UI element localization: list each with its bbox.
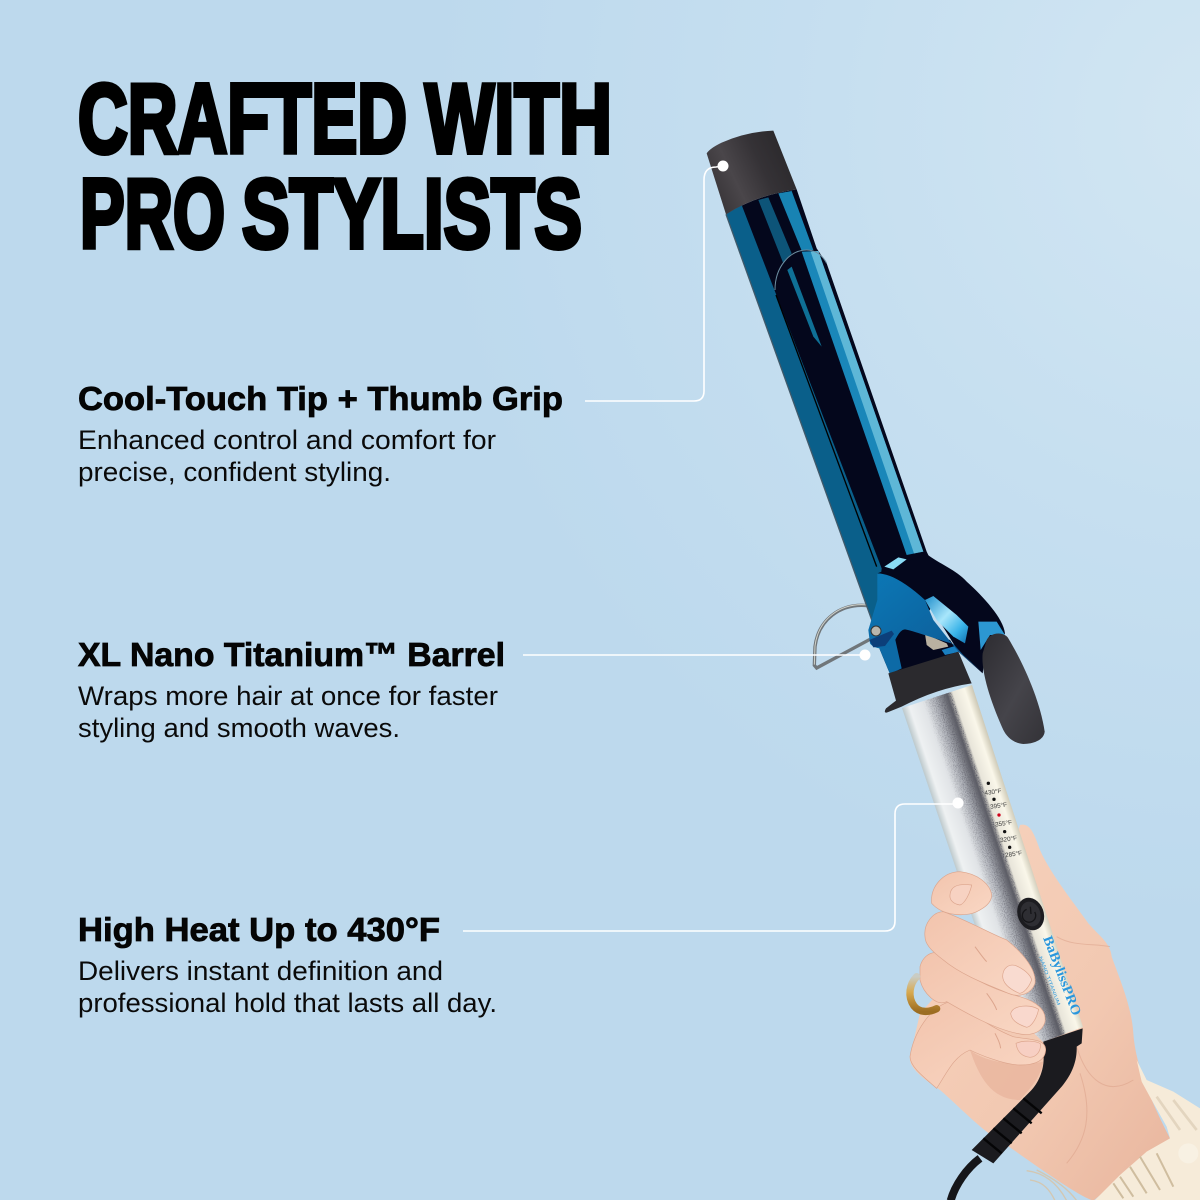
connector: barrel bbox=[523, 650, 870, 660]
callout: high heat: professional hold that lasts all day. bbox=[78, 988, 497, 1018]
temperature scale: 355°F bbox=[995, 818, 1013, 829]
power button bbox=[1013, 894, 1049, 934]
callout: high heat bbox=[78, 912, 497, 1018]
callout: high heat: High Heat Up to 430°F bbox=[78, 912, 440, 949]
brand label: NANO TITANIUM bbox=[1038, 956, 1061, 1006]
callout: barrel: styling and smooth waves. bbox=[78, 713, 400, 743]
title: WITH bbox=[425, 64, 612, 174]
connector: tip bbox=[585, 160, 728, 401]
product: curling iron held in hand bbox=[463, 131, 1200, 1200]
callout: barrel: XL Nano Titanium™ Barrel bbox=[78, 637, 505, 674]
clamp housing bbox=[868, 554, 1005, 674]
barrel bbox=[726, 189, 943, 667]
temperature scale: 285°F bbox=[1005, 849, 1023, 859]
temperature scale: 320°F bbox=[1000, 834, 1018, 844]
temperature scale: 430°F bbox=[984, 787, 1002, 797]
thumb grip paddle bbox=[982, 633, 1045, 744]
callout: high heat: Delivers instant definition and bbox=[78, 956, 443, 986]
callout: barrel: Wraps more hair at once for faster bbox=[78, 681, 498, 711]
title: STYLISTS bbox=[242, 158, 582, 268]
brand label: BaBylissPRO bbox=[1039, 934, 1083, 1018]
barrel: clamp highlight bbox=[802, 251, 923, 555]
silver handle bbox=[902, 685, 1083, 1042]
title: PRO bbox=[80, 158, 225, 268]
barrel: left teal band bbox=[726, 205, 882, 630]
temperature scale bbox=[984, 782, 1023, 859]
cool-touch tip bbox=[707, 131, 797, 214]
wire clamp lever bbox=[814, 605, 870, 668]
hand: fingers bbox=[910, 872, 1046, 1088]
callout: cool-touch tip: Cool-Touch Tip + Thumb Grip bbox=[78, 381, 563, 418]
title bbox=[78, 64, 612, 268]
cord and strain relief bbox=[951, 1028, 1083, 1200]
callout: barrel bbox=[78, 637, 505, 743]
title: CRAFTED bbox=[78, 64, 407, 174]
temperature scale: 395°F bbox=[990, 801, 1008, 811]
lace cuff bbox=[1027, 1060, 1200, 1200]
callout: cool-touch tip bbox=[78, 381, 563, 487]
gold ring bbox=[910, 977, 937, 1011]
collar bbox=[885, 652, 972, 713]
callout: cool-touch tip: precise, confident styling. bbox=[78, 457, 391, 487]
hand: palm and thumb bbox=[910, 825, 1170, 1200]
connector: heat bbox=[463, 798, 964, 931]
callout: cool-touch tip: Enhanced control and comfort for bbox=[78, 425, 496, 455]
